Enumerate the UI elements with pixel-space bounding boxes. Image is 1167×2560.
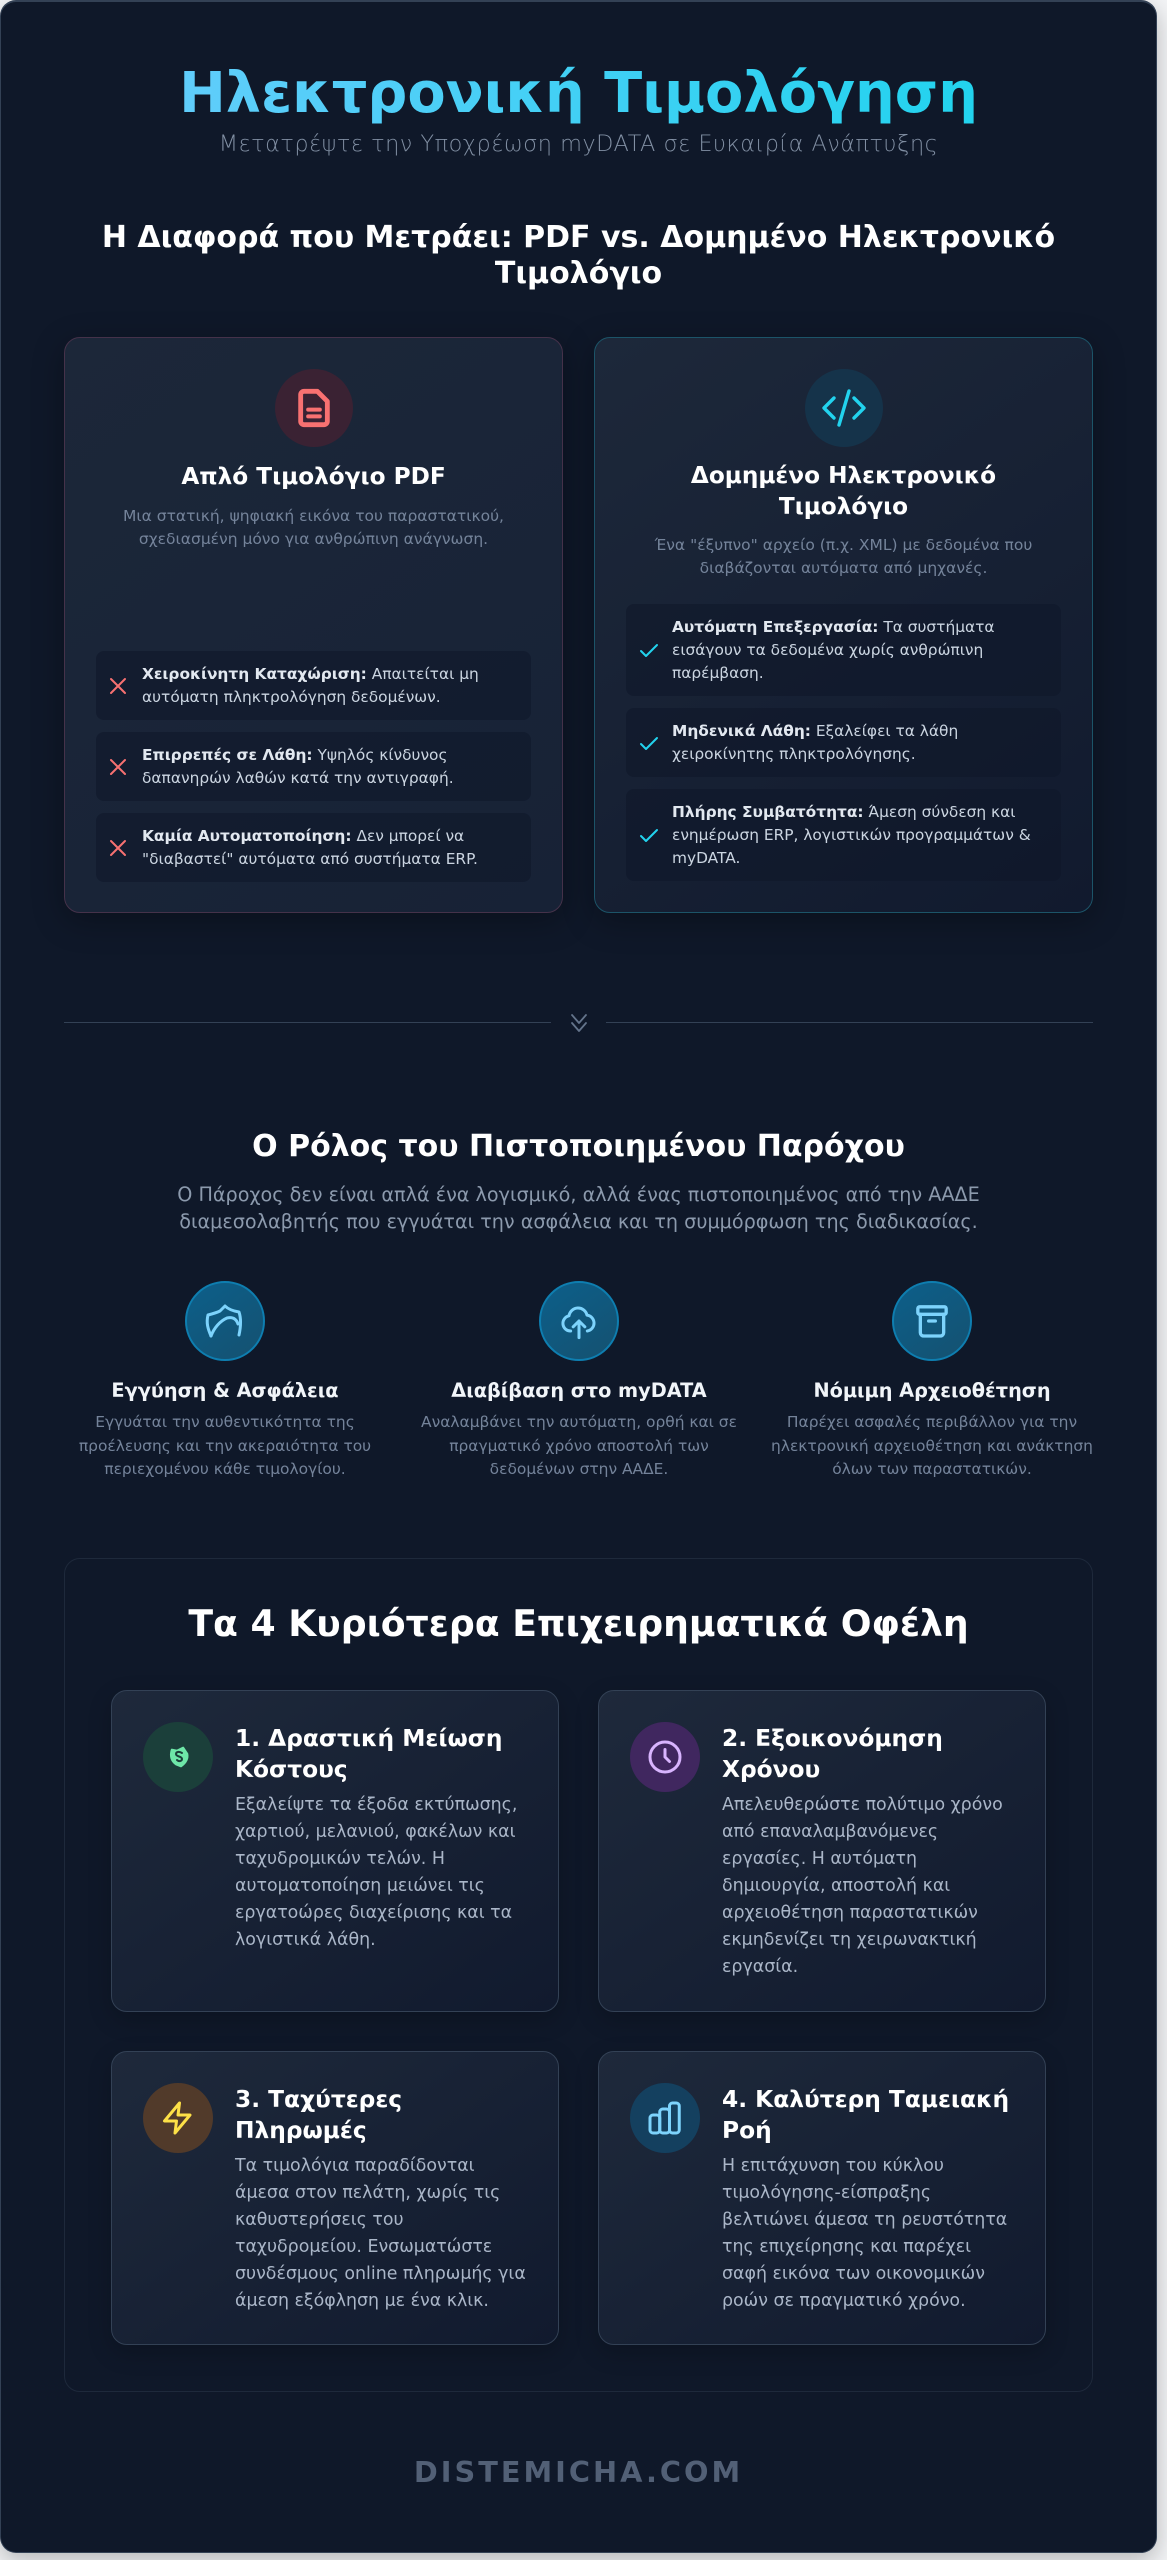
- card text: εργασίες. Η αυτόματη: [722, 1849, 917, 1869]
- card text: καθυστερήσεις του: [235, 2210, 404, 2230]
- card text: βελτιώνει άμεσα τη ρευστότητα: [722, 2210, 1007, 2230]
- column description: περιεχομένου κάθε τιμολογίου.: [104, 1460, 346, 1478]
- card text: [235, 1795, 517, 1950]
- card text: Η επιτάχυνση του κύκλου: [722, 2156, 944, 2176]
- footer brand: DISTEMICHA.COM: [414, 2455, 743, 2489]
- card text: εργασία.: [722, 1957, 798, 1977]
- column description: [771, 1413, 1093, 1478]
- divider with chevrons: [64, 1014, 1093, 1032]
- item text: myDATA.: [672, 849, 740, 867]
- provider description: [177, 1183, 980, 1233]
- item text: [142, 665, 479, 706]
- benefits heading: Τα 4 Κυριότερα Επιχειρηματικά Οφέλη: [188, 1602, 969, 1645]
- card text: ταχυδρομικών τελών. Η: [235, 1849, 445, 1869]
- title: Ηλεκτρονική Τιμολόγηση: [179, 61, 978, 126]
- column description: Παρέχει ασφαλές περιβάλλον για την: [787, 1413, 1077, 1431]
- column description: προέλευσης και την ακεραιότητα του: [79, 1436, 371, 1454]
- subtitle: Μετατρέψτε την Υποχρέωση myDATA σε Ευκαιρία Ανάπτυξης: [219, 131, 938, 157]
- card text: Απελευθερώστε πολύτιμο χρόνο: [722, 1795, 1003, 1815]
- list item: zero errors: [626, 708, 1061, 777]
- card text: συνδέσμους online πληρωμής για: [235, 2264, 526, 2284]
- provider column: transmission: [421, 1281, 737, 1478]
- card text: εργατοώρες διαχείρισης και τα: [235, 1903, 512, 1923]
- column description: πραγματικό χρόνο αποστολή των: [449, 1436, 709, 1454]
- card title: [235, 2086, 402, 2144]
- benefit card 3: [111, 2051, 559, 2345]
- card text: [722, 1795, 1003, 1977]
- panel description: σχεδιασμένη μόνο για ανθρώπινη ανάγνωση.: [139, 530, 488, 548]
- column description: Αναλαμβάνει την αυτόματη, ορθή και σε: [421, 1413, 737, 1431]
- column title: Διαβίβαση στο myDATA: [451, 1379, 707, 1402]
- column description: Εγγυάται την αυθεντικότητα της: [95, 1413, 355, 1431]
- card text: σαφή εικόνα των οικονομικών: [722, 2264, 985, 2284]
- card title: 1. Δραστική Μείωση: [235, 1725, 502, 1752]
- panel title: Δομημένο Ηλεκτρονικό: [691, 462, 996, 489]
- card text: τιμολόγησης-είσπραξης: [722, 2183, 931, 2203]
- icon: cross: [110, 840, 126, 856]
- card text: Εξαλείψτε τα έξοδα εκτύπωσης,: [235, 1795, 517, 1815]
- item text: [672, 618, 995, 682]
- icon: code: [805, 369, 883, 447]
- card text: χαρτιού, μελανιού, φακέλων και: [235, 1822, 516, 1842]
- panel title: Τιμολόγιο: [779, 493, 908, 520]
- card text: εκμηδενίζει τη χειρωνακτική: [722, 1930, 977, 1950]
- column description: δεδομένων στην ΑΑΔΕ.: [490, 1460, 668, 1478]
- card text: [234, 2156, 526, 2311]
- card title: Κόστους: [235, 1756, 348, 1783]
- icon: lightning: [143, 2083, 213, 2153]
- item text: [672, 722, 958, 763]
- card text: δημιουργία, αποστολή και: [722, 1876, 950, 1896]
- panel description: [123, 507, 504, 548]
- panel description: [654, 536, 1032, 577]
- column description: όλων των παραστατικών.: [832, 1460, 1032, 1478]
- card title: [722, 2086, 1009, 2144]
- icon: double chevron: [571, 1014, 587, 1032]
- list item: automatic processing: [626, 604, 1061, 696]
- item text: Αυτόματη Επεξεργασία: Τα συστήματα: [672, 618, 995, 636]
- panel: business benefits: [64, 1558, 1093, 2392]
- card text: από επαναλαμβανόμενες: [722, 1822, 938, 1842]
- icon: check: [640, 829, 658, 842]
- item text: [142, 746, 454, 787]
- heading: difference: [102, 220, 1055, 291]
- card title: Πληρωμές: [235, 2117, 367, 2144]
- card title: [722, 1725, 943, 1783]
- column description: ηλεκτρονική αρχειοθέτηση και ανάκτηση: [771, 1436, 1093, 1454]
- item text: χειροκίνητης πληκτρολόγησης.: [672, 745, 916, 763]
- card text: λογιστικά λάθη.: [235, 1930, 376, 1950]
- icon: check: [640, 644, 658, 657]
- panel title: [691, 462, 996, 520]
- item text: δαπανηρών λαθών κατά την αντιγραφή.: [142, 769, 454, 787]
- heading: difference: Τιμολόγιο: [495, 256, 662, 291]
- card text: αρχειοθέτηση παραστατικών: [722, 1903, 978, 1923]
- card text: [722, 2156, 1007, 2311]
- card title: 2. Εξοικονόμηση: [722, 1725, 943, 1752]
- card title: 4. Καλύτερη Ταμειακή: [722, 2086, 1009, 2113]
- heading: provider role: Ο Ρόλος του Πιστοποιημένου Παρόχου: [252, 1129, 905, 1164]
- item text: ενημέρωση ERP, λογιστικών προγραμμάτων &: [672, 826, 1031, 844]
- card title: Ροή: [722, 2117, 772, 2144]
- panel: PDF invoice: [64, 337, 563, 913]
- list item: error prone: [96, 732, 531, 801]
- icon: cross: [110, 759, 126, 775]
- panel description: Μια στατική, ψηφιακή εικόνα του παραστατικού,: [123, 507, 504, 525]
- benefit card 2: [598, 1690, 1046, 2012]
- item text: Επιρρεπές σε Λάθη: Υψηλός κίνδυνος: [142, 746, 448, 764]
- list item: manual entry: [96, 651, 531, 720]
- card title: [235, 1725, 502, 1783]
- item text: Πλήρης Συμβατότητα: Άμεση σύνδεση και: [672, 803, 1015, 821]
- benefit card 4: [598, 2051, 1046, 2345]
- provider description: Ο Πάροχος δεν είναι απλά ένα λογισμικό, αλλά ένας πιστοποιημένος από την ΑΑΔΕ: [177, 1183, 980, 1206]
- icon: bar chart: [630, 2083, 700, 2153]
- card text: Τα τιμολόγια παραδίδονται: [235, 2156, 475, 2176]
- panel description: διαβάζονται αυτόματα από μηχανές.: [700, 559, 987, 577]
- column title: Εγγύηση & Ασφάλεια: [111, 1379, 339, 1402]
- icon: check: [640, 737, 658, 750]
- list item: compatibility: [626, 789, 1061, 881]
- column title: Νόμιμη Αρχειοθέτηση: [813, 1379, 1051, 1402]
- icon: money: [143, 1722, 213, 1792]
- card title: Χρόνου: [722, 1756, 820, 1783]
- card text: άμεση εξόφληση με ένα κλικ.: [235, 2291, 489, 2311]
- item text: Καμία Αυτοματοποίηση: Δεν μπορεί να: [142, 827, 464, 845]
- icon: shield: [185, 1281, 265, 1361]
- item text: "διαβαστεί" αυτόματα από συστήματα ERP.: [142, 850, 478, 868]
- provider description: διαμεσολαβητής που εγγυάται την ασφάλεια και τη συμμόρφωση της διαδικασίας.: [179, 1210, 978, 1233]
- list item: no automation: [96, 813, 531, 882]
- benefit card 1: [111, 1690, 559, 2012]
- card text: της επιχείρησης και παρέχει: [722, 2237, 971, 2257]
- icon: clock: [630, 1722, 700, 1792]
- icon: cross: [110, 678, 126, 694]
- panel description: Ένα "έξυπνο" αρχείο (π.χ. XML) με δεδομένα που: [655, 536, 1032, 554]
- item text: αυτόματη πληκτρολόγηση δεδομένων.: [142, 688, 441, 706]
- card title: 3. Ταχύτερες: [235, 2086, 402, 2113]
- panel title: Απλό Τιμολόγιο PDF: [181, 463, 446, 490]
- item text: Χειροκίνητη Καταχώριση: Απαιτείται μη: [142, 665, 479, 683]
- provider column: security: [79, 1281, 371, 1478]
- card text: άμεσα στον πελάτη, χωρίς τις: [235, 2183, 500, 2203]
- icon: document: [275, 369, 353, 447]
- panel: structured invoice: [594, 337, 1093, 913]
- column description: [421, 1413, 737, 1478]
- item text: Μηδενικά Λάθη: Εξαλείφει τα λάθη: [672, 722, 958, 740]
- heading: difference: Η Διαφορά που Μετράει: PDF vs. Δομημένο Ηλεκτρονικό: [102, 220, 1055, 255]
- card text: ροών σε πραγματικό χρόνο.: [722, 2291, 966, 2311]
- column description: [79, 1413, 371, 1478]
- provider column: archiving: [771, 1281, 1093, 1478]
- icon: cloud upload: [539, 1281, 619, 1361]
- item text: εισάγουν τα δεδομένα χωρίς ανθρώπινη: [672, 641, 983, 659]
- icon: archive: [892, 1281, 972, 1361]
- item text: [142, 827, 478, 868]
- item text: [672, 803, 1031, 867]
- card text: αυτοματοποίηση μειώνει τις: [235, 1876, 485, 1896]
- item text: παρέμβαση.: [672, 664, 764, 682]
- card text: ταχυδρομείου. Ενσωματώστε: [235, 2237, 492, 2257]
